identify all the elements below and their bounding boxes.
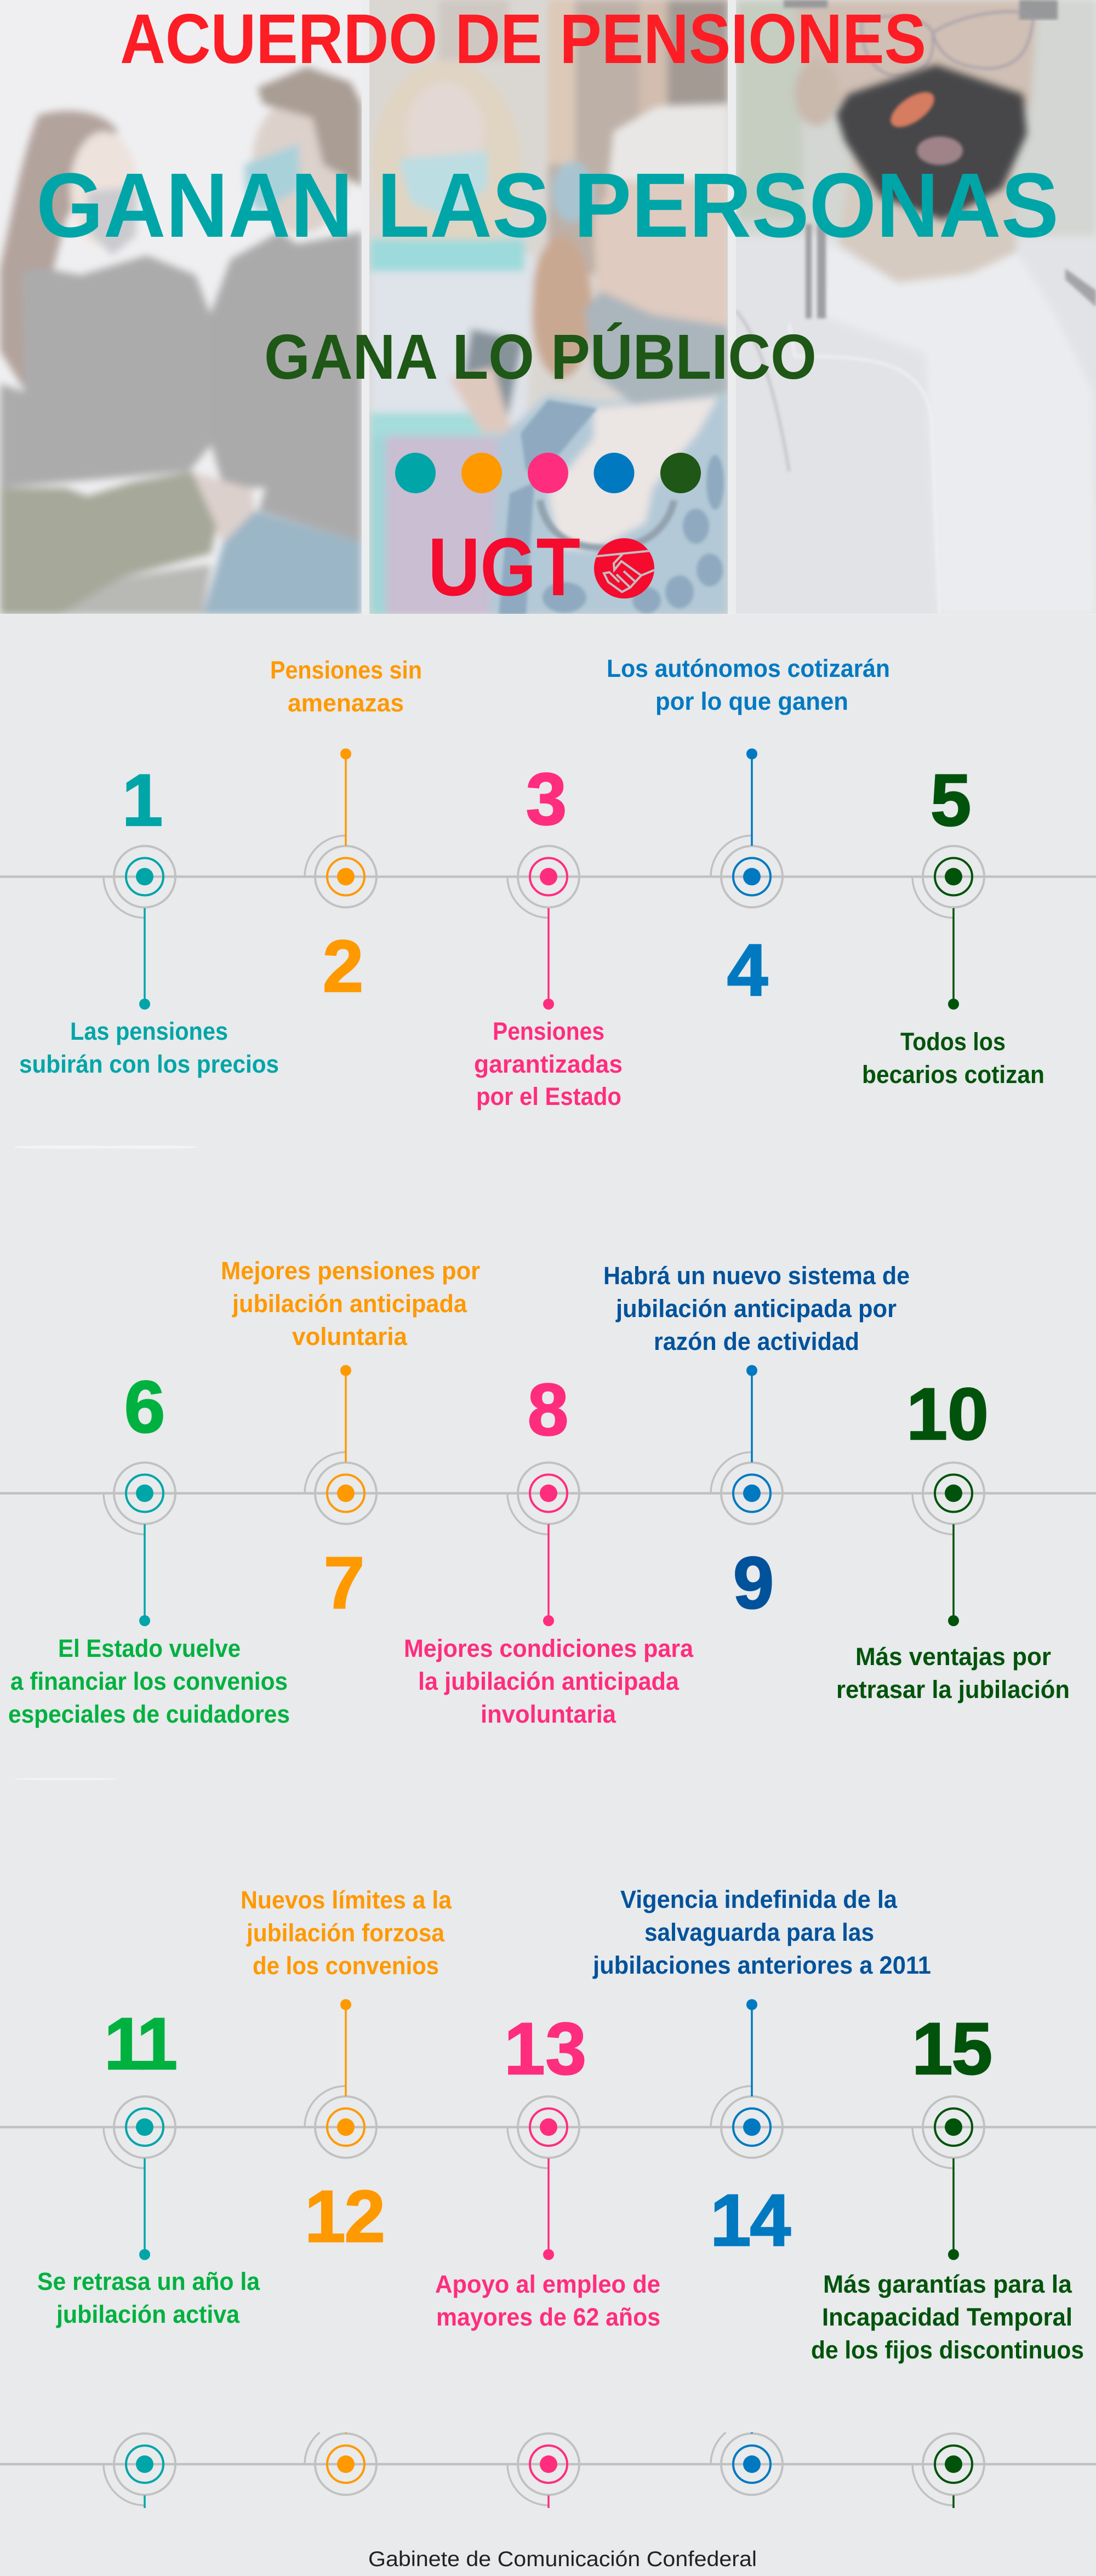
node 6 (8, 1366, 290, 1728)
node 15: Incapacidad Temporal (822, 2303, 1072, 2331)
node 13: Apoyo al empleo de (435, 2270, 660, 2298)
colour dots row (395, 453, 701, 493)
node 6: a financiar los convenios (10, 1667, 288, 1695)
node 8: la jubilación anticipada (418, 1667, 680, 1695)
node 2 (270, 656, 422, 1007)
footer credit: Gabinete de Comunicación Confederal (368, 2547, 757, 2571)
node 13: mayores de 62 años (436, 2303, 660, 2331)
node 3 (474, 759, 623, 1110)
node 5 (862, 760, 1044, 1088)
node 9: razón de actividad (654, 1327, 859, 1355)
node 4: 4 (727, 930, 768, 1011)
node 7 (221, 1257, 480, 1624)
node 3: por el Estado (476, 1082, 621, 1110)
logo: UGT: UGT (428, 521, 580, 613)
node 15: Más garantías para la (823, 2270, 1072, 2298)
node 5: Todos los (900, 1028, 1006, 1056)
node 15 (811, 2008, 1084, 2364)
node 8: Mejores condiciones para (404, 1634, 694, 1662)
node 1: subirán con los precios (19, 1050, 279, 1078)
node 11 (37, 2003, 260, 2328)
node 7: 7 (324, 1542, 364, 1624)
node 7: Mejores pensiones por (221, 1257, 480, 1285)
node 3: garantizadas (474, 1050, 623, 1078)
node 12: jubilación forzosa (246, 1919, 445, 1947)
node 1: 1 (122, 760, 163, 841)
node 10 (836, 1374, 1070, 1703)
node 6: especiales de cuidadores (8, 1700, 290, 1728)
node 3: 3 (526, 759, 567, 840)
heading: Ganan las personas: GANAN LAS PERSONAS (36, 155, 1059, 257)
node 10: 10 (906, 1374, 989, 1455)
node 14: jubilaciones anteriores a 2011 (592, 1951, 931, 1979)
node 12: de los convenios (253, 1952, 439, 1980)
photo: two women with masks (369, 0, 728, 615)
panel: closing timeline row (0, 2432, 1096, 2508)
node 11: Se retrasa un año la (37, 2267, 260, 2295)
photo: person with dark mask and white jacket (736, 0, 1096, 615)
node 8 (404, 1369, 694, 1728)
heading: Gana lo público: GANA LO PÚBLICO (264, 321, 817, 392)
node 7: jubilación anticipada (232, 1290, 467, 1318)
node 11: jubilación activa (56, 2300, 240, 2328)
node 9: 9 (733, 1542, 774, 1624)
node 9: Habrá un nuevo sistema de (603, 1262, 910, 1290)
panel: timeline row 1 (0, 654, 1096, 1110)
node 8: involuntaria (481, 1700, 616, 1728)
node 13: 13 (504, 2008, 586, 2090)
node 4: Los autónomos cotizarán (607, 654, 890, 682)
panel: timeline row 3 (0, 1885, 1096, 2364)
node 4: por lo que ganen (655, 687, 848, 715)
node 7: voluntaria (292, 1323, 408, 1350)
node 5: becarios cotizan (862, 1061, 1044, 1088)
hero photo background (0, 0, 1096, 615)
node 4 (607, 654, 890, 1011)
node 1: Las pensiones (70, 1017, 228, 1045)
node 14: salvaguarda para las (644, 1918, 874, 1946)
node 12: 12 (305, 2176, 385, 2258)
node 2: amenazas (288, 689, 404, 717)
node 6: 6 (124, 1366, 165, 1448)
node 14: 14 (710, 2180, 791, 2261)
node 10: Más ventajas por (855, 1643, 1051, 1671)
node 3: Pensiones (493, 1017, 604, 1045)
node 14: Vigencia indefinida de la (620, 1885, 898, 1913)
node 5: 5 (931, 760, 971, 841)
photo: couple with masks (0, 64, 362, 614)
node 9 (603, 1262, 910, 1624)
node 15: 15 (912, 2008, 992, 2090)
node 10: retrasar la jubilación (836, 1675, 1070, 1703)
node 11: 11 (104, 2003, 178, 2085)
node 1 (19, 760, 279, 1078)
node 12: Nuevos límites a la (241, 1886, 452, 1914)
node 8: 8 (528, 1369, 568, 1451)
title: Acuerdo de pensiones: ACUERDO DE PENSIONES (120, 0, 926, 78)
panel: timeline row 2 (0, 1257, 1096, 1728)
node 2: 2 (323, 926, 363, 1007)
node 14 (592, 1885, 931, 2261)
node 13 (435, 2008, 660, 2331)
node 15: de los fijos discontinuos (811, 2336, 1084, 2364)
node 12 (241, 1886, 452, 2258)
node 2: Pensiones sin (270, 656, 422, 684)
node 6: El Estado vuelve (58, 1634, 241, 1662)
node 9: jubilación anticipada por (615, 1295, 897, 1323)
